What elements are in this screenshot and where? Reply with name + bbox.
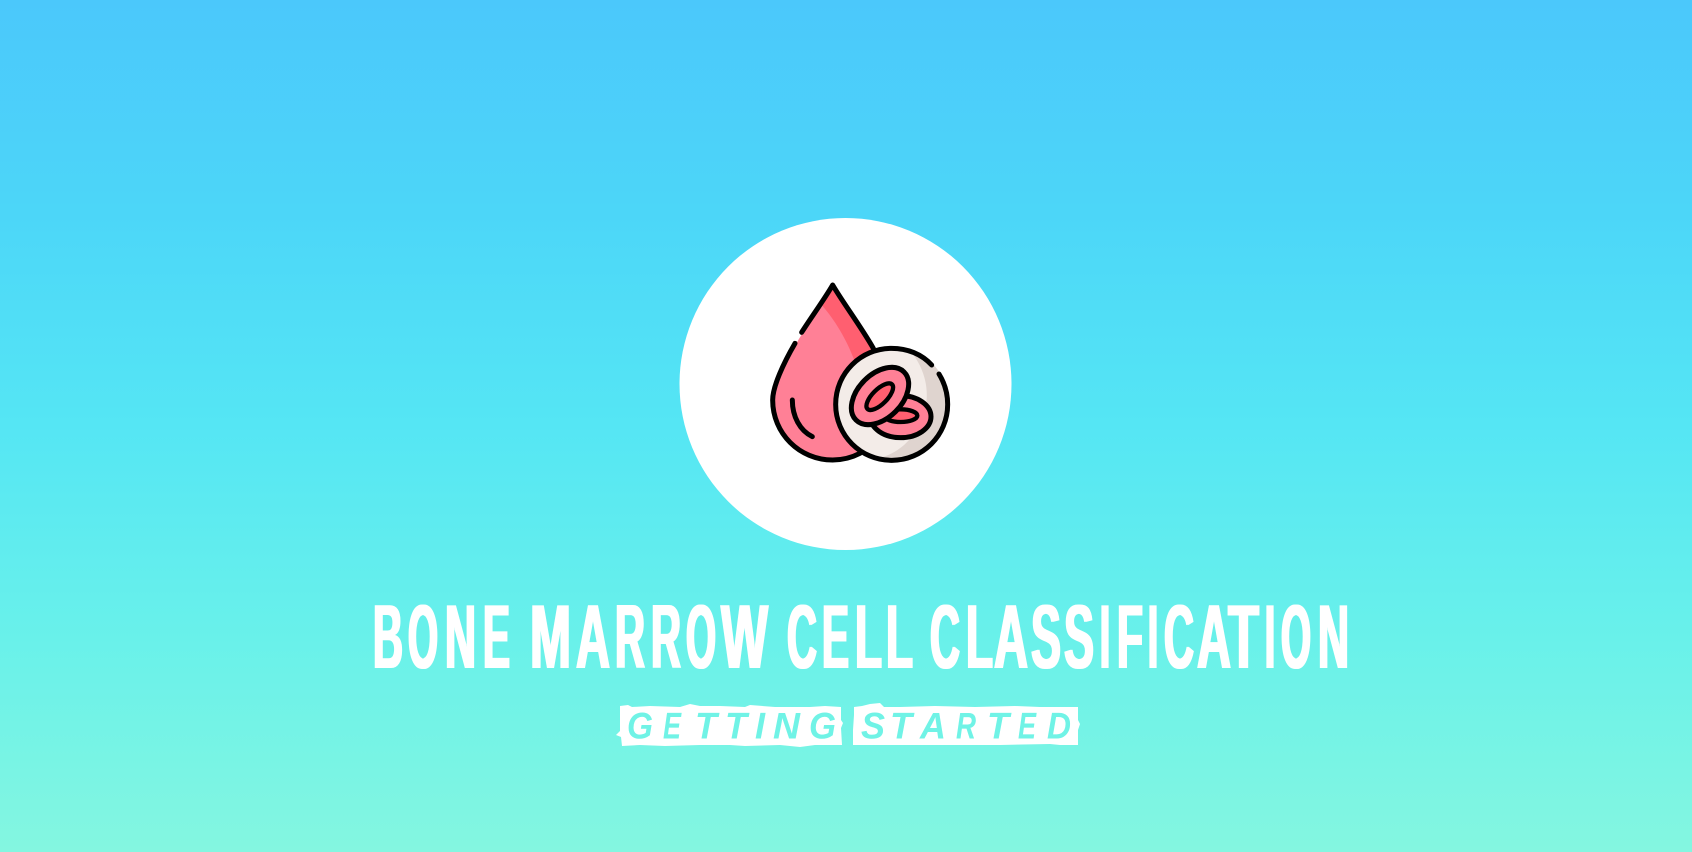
title: E xyxy=(483,587,510,688)
title: C xyxy=(1164,587,1194,688)
subtitle label: started: D xyxy=(1047,706,1071,746)
subtitle label: getting: G xyxy=(809,706,836,746)
title: F xyxy=(1117,587,1143,688)
subtitle label: getting: G xyxy=(627,706,653,746)
subtitle label: getting: N xyxy=(773,706,801,746)
title: L xyxy=(855,587,882,688)
title: C xyxy=(787,587,817,688)
subtitle label: started: T xyxy=(987,706,1012,746)
icon: marrow cell circle xyxy=(836,348,948,460)
title: O xyxy=(686,587,716,688)
subtitle label: getting: T xyxy=(695,706,720,746)
title: L xyxy=(966,587,993,688)
title: R xyxy=(615,587,645,688)
title: A xyxy=(1197,587,1231,688)
title xyxy=(373,587,1349,688)
title: O xyxy=(1281,587,1311,688)
icon: red blood cell back xyxy=(870,396,931,438)
title: W xyxy=(721,587,768,688)
subtitle label: getting: I xyxy=(755,706,766,746)
subtitle label: started: T xyxy=(890,706,915,746)
subtitle label: started: R xyxy=(956,706,976,746)
title: S xyxy=(1064,587,1094,688)
title: A xyxy=(994,587,1028,688)
title: M xyxy=(530,587,571,688)
subtitle label: getting xyxy=(616,704,843,747)
icon: red blood cell front xyxy=(840,356,920,436)
title: N xyxy=(445,587,476,688)
title: S xyxy=(1031,587,1061,688)
subtitle label: started xyxy=(853,703,1080,746)
icon: blood drop with bone marrow cell xyxy=(773,285,948,460)
text: N xyxy=(1318,587,1349,688)
white circle badge xyxy=(680,218,1012,550)
title: C xyxy=(930,587,960,688)
title: I xyxy=(1148,587,1158,688)
subtitle label: started: S xyxy=(861,706,885,746)
title: E xyxy=(822,587,849,688)
title: B xyxy=(373,587,403,688)
subtitle label: getting: E xyxy=(663,706,682,746)
title: A xyxy=(576,587,610,688)
subtitle label: started: A xyxy=(919,706,946,746)
title: T xyxy=(1228,587,1259,688)
title: I xyxy=(1265,587,1275,688)
title: R xyxy=(651,587,681,688)
subtitle label: getting: T xyxy=(725,706,750,746)
title: L xyxy=(886,587,913,688)
icon: blood drop xyxy=(773,285,874,460)
subtitle label: started: E xyxy=(1018,706,1037,746)
title: O xyxy=(408,587,438,688)
title: I xyxy=(1100,587,1110,688)
